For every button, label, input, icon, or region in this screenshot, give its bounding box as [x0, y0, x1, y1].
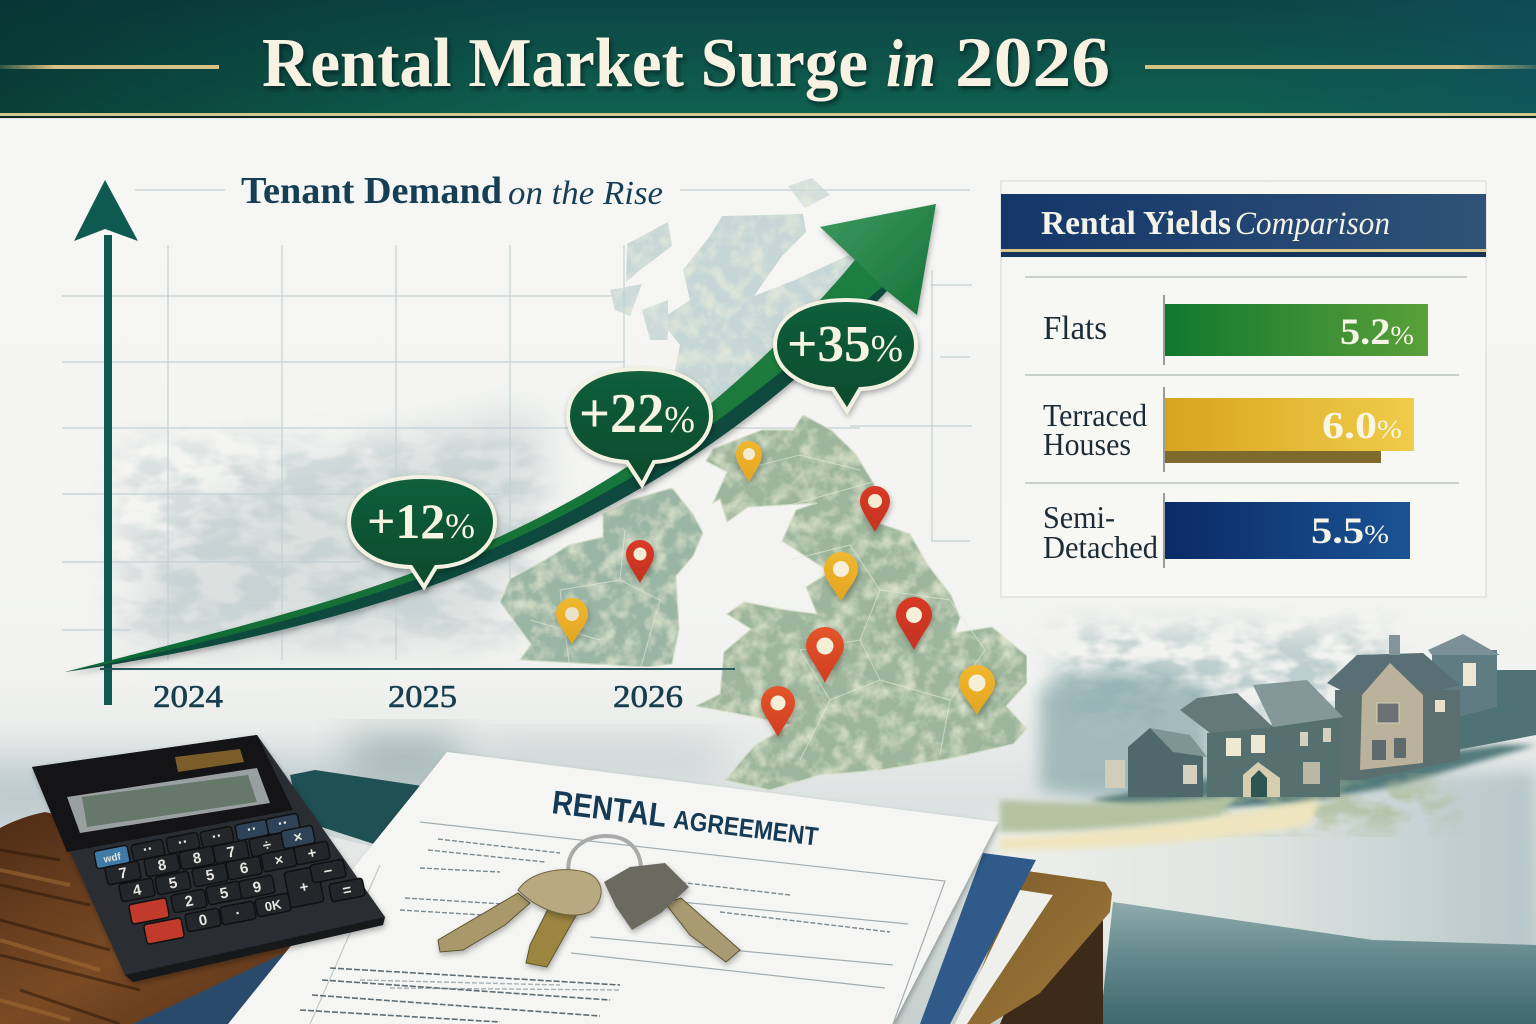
y axis arrow	[74, 180, 138, 705]
keypad: 7	[225, 843, 237, 862]
keypad: 5	[167, 874, 179, 893]
key: lower blade	[526, 905, 578, 967]
blue folder under calculator	[133, 940, 330, 1024]
row: semi-detached: Detached	[1043, 529, 1158, 565]
pin: red Ireland north	[626, 540, 654, 583]
house: main	[1180, 680, 1343, 797]
keypad: 5	[204, 866, 216, 885]
map pins	[556, 441, 995, 737]
pin: orange Midlands	[806, 627, 844, 683]
background map wash: faded Europe silhouette	[120, 410, 550, 650]
chart heading	[241, 170, 663, 212]
keypad: ··	[176, 833, 189, 852]
header band	[0, 0, 1536, 119]
desk left	[0, 812, 370, 1024]
row: semi-detached: 5.5 %	[1311, 511, 1389, 552]
key: right blade	[665, 898, 740, 962]
chart heading: Tenant Demand	[241, 170, 502, 212]
x axis	[100, 668, 735, 670]
desk right corner	[960, 870, 1112, 1024]
document: rental agreement: RENTAL AGREEMENT	[550, 783, 821, 853]
row: semi-detached: Semi-	[1043, 499, 1115, 535]
house: gabled	[1327, 635, 1460, 780]
Scottish Highlands faded	[610, 178, 885, 410]
callout: +22%	[568, 369, 711, 485]
white sheet under calculator	[325, 835, 385, 885]
title: 2026	[955, 24, 1110, 102]
title: Rental Market Surge	[262, 25, 868, 102]
row: flats: Flats	[1043, 310, 1107, 347]
keypad: +	[298, 878, 310, 897]
rising green arrow	[65, 204, 936, 672]
pin: orange Wales	[761, 686, 795, 737]
keypad: 2	[183, 892, 195, 911]
keypad: 4	[131, 881, 143, 900]
blue folder	[920, 853, 1036, 1024]
keypad: 9	[251, 878, 263, 897]
row: terraced houses: Houses	[1043, 426, 1131, 462]
Great Britain	[696, 415, 1027, 790]
panel heading	[1001, 194, 1486, 257]
callout: +12%: +12%	[367, 493, 475, 549]
row: flats: 5.2%	[1340, 312, 1414, 353]
callout: +12%	[349, 477, 495, 587]
axis year labels: 2025	[388, 678, 457, 714]
row: terraced houses	[1043, 397, 1414, 463]
keypad: ··	[276, 814, 289, 833]
panel heading: Comparison	[1235, 206, 1390, 242]
pin: yellow Ireland south	[556, 598, 588, 644]
panel heading: Rental Yields	[1041, 205, 1231, 242]
keypad: 0	[197, 911, 209, 930]
key ring	[568, 836, 641, 880]
fog over lower left	[0, 735, 720, 830]
houses illustration	[1105, 634, 1500, 797]
keypad: ×	[273, 851, 285, 870]
keypad: ··	[210, 827, 223, 846]
keypad: 8	[156, 856, 168, 875]
keypad: 7	[117, 864, 129, 883]
keypad: ··	[245, 820, 258, 839]
key: dark fob	[604, 863, 689, 930]
house: far right	[1428, 634, 1500, 717]
callout: +35%: +35%	[787, 316, 903, 373]
pin: yellow East Anglia	[959, 665, 995, 715]
keypad: −	[322, 862, 334, 881]
document: rental agreement	[228, 752, 998, 1024]
keypad: ÷	[261, 836, 273, 855]
landscape wash behind houses	[990, 630, 1536, 1024]
pin: red north England	[860, 486, 890, 532]
callout: +35%	[775, 300, 916, 411]
key: left blade	[438, 893, 530, 952]
Ireland	[500, 488, 703, 667]
keypad: wdf	[102, 851, 122, 866]
keypad: 5	[218, 884, 230, 903]
chart gridlines	[62, 190, 972, 660]
keypad: ×	[292, 828, 304, 847]
axis year labels: 2024	[153, 678, 223, 714]
keypad: =	[341, 881, 353, 900]
keypad: ·	[234, 905, 242, 922]
map of Britain and Ireland	[500, 178, 1027, 790]
callout: +22%: +22%	[579, 383, 695, 445]
white sheet behind	[955, 890, 1053, 1024]
keypad: 8	[191, 849, 203, 868]
region lines	[530, 455, 985, 760]
keypad: 0K	[264, 896, 283, 914]
keys	[438, 836, 740, 967]
keypad: +	[306, 844, 318, 863]
keypad	[94, 812, 365, 944]
house: small left	[1105, 728, 1207, 797]
row: terraced houses: 6.0 %	[1322, 405, 1402, 447]
row: flats	[1043, 304, 1428, 356]
axis year labels	[153, 678, 683, 714]
keypad: 6	[238, 859, 250, 878]
key: bow	[518, 870, 601, 915]
row: terraced houses: Terraced	[1043, 397, 1147, 433]
calculator	[32, 735, 385, 982]
panel: rental yields comparison	[1001, 181, 1486, 597]
keypad: ··	[141, 840, 154, 859]
pin: yellow Manchester	[824, 552, 858, 601]
title: in	[886, 25, 936, 101]
pin: yellow Scotland	[736, 441, 762, 482]
pin: red Midlands east	[896, 597, 932, 650]
chart heading: on the Rise	[508, 175, 663, 212]
axis year labels: 2026	[613, 678, 683, 714]
teal folder behind calculator	[290, 770, 422, 846]
row: semi-detached	[1043, 499, 1410, 565]
